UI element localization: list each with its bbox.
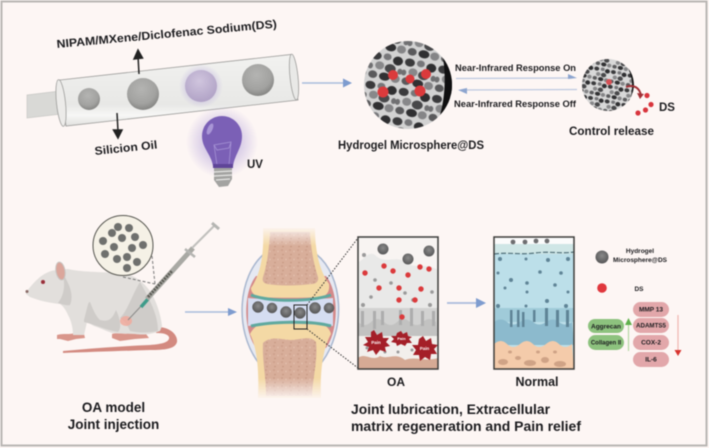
- released DS particles: [635, 93, 654, 116]
- droplet small: [78, 88, 100, 110]
- icon: UV bulb: [186, 106, 258, 187]
- pill: ADAMTS5: ADAMTS5: [636, 322, 667, 330]
- droplet cured: [242, 64, 274, 96]
- label: OA model / Joint injection: [68, 400, 159, 432]
- synovial lining: [246, 276, 336, 348]
- label: Joint lubrication heading: [351, 402, 582, 434]
- DS drug particles: [378, 69, 431, 98]
- label: Joint lubrication heading: Joint lubrication, Extracellular: [351, 402, 551, 417]
- legend: DS: DS: [634, 286, 644, 293]
- DS particles: [362, 263, 432, 320]
- pill: Aggrecan: Aggrecan: [591, 324, 621, 330]
- injection site: [120, 316, 132, 326]
- arrow: tube to microsphere: [302, 78, 352, 88]
- label: UV: UV: [247, 159, 263, 171]
- syringe: [128, 223, 219, 320]
- pill: MMP 13: MMP 13: [639, 306, 663, 314]
- capsule: [242, 254, 339, 362]
- upper bone: [251, 228, 329, 298]
- pain bursts: [363, 330, 438, 361]
- legend: hydrogel microsphere: Hydrogel: [626, 248, 654, 255]
- microspheres in joint: [252, 302, 334, 318]
- panel: Normal tissue: [494, 237, 574, 369]
- zoom dotted lines: [307, 238, 358, 368]
- rat body: [26, 269, 162, 335]
- rat with injection: [26, 216, 219, 353]
- legend: hydrogel microsphere: [596, 248, 668, 264]
- arrow: down to silicone oil: [114, 113, 122, 138]
- label: DS: DS: [659, 102, 675, 114]
- rat body shading: [58, 272, 158, 332]
- hydrogel microsphere with DS: [364, 41, 452, 129]
- label: OA model / Joint injection: OA model: [82, 400, 145, 415]
- surface microspheres: [511, 239, 549, 244]
- droplet under UV: [179, 64, 223, 108]
- rat eye: [41, 280, 45, 284]
- magnified microsphere circle: [93, 216, 153, 276]
- arrow: response off: [458, 88, 577, 94]
- arrow: release: [626, 86, 641, 96]
- label: OA: OA: [387, 375, 405, 389]
- label: Near-Infrared Response Off: Near-Infrared Response Off: [454, 99, 577, 110]
- joint anatomy: [242, 226, 358, 400]
- lower bone: [250, 324, 331, 398]
- legend: DS: [597, 283, 644, 293]
- pink downregulated markers: [633, 302, 669, 367]
- microfluidic tube: [27, 54, 300, 127]
- pill: Collagen II: Collagen II: [591, 340, 621, 346]
- arrow: up green: [625, 318, 632, 351]
- arrow: up to NIPAM label: [134, 50, 142, 74]
- pill: IL-6: IL-6: [645, 356, 657, 364]
- label: Control release: Control release: [569, 124, 654, 138]
- small microsphere releasing DS: [582, 59, 654, 116]
- microspheres: [378, 244, 434, 264]
- arrow: OA to normal: [447, 298, 486, 308]
- green upregulated markers: [588, 319, 624, 350]
- rat ear: [55, 261, 66, 281]
- dashed callout lines: [123, 256, 155, 284]
- cartilage: [251, 295, 331, 300]
- pill: COX-2: COX-2: [641, 340, 661, 346]
- arrow: down red: [674, 315, 682, 356]
- lower marrow: [263, 338, 316, 396]
- arrow: response on: [456, 74, 577, 79]
- synovial fluid: [248, 298, 333, 326]
- title: NIPAM/MXene/Diclofenac Sodium(DS): NIPAM/MXene/Diclofenac Sodium(DS): [56, 19, 278, 51]
- label: Normal: Normal: [515, 375, 559, 389]
- legend: hydrogel microsphere: Microsphere@DS: [613, 257, 668, 264]
- panel: OA tissue: [358, 237, 438, 369]
- label: Hydrogel Microsphere@DS: Hydrogel Microsphere@DS: [338, 138, 484, 152]
- rat tail: [63, 327, 177, 353]
- upper marrow: [263, 232, 318, 286]
- label: Near-Infrared Response On: Near-Infrared Response On: [455, 63, 576, 74]
- pain bursts: Pain: [397, 336, 406, 341]
- label: Joint lubrication heading: matrix regeneration and Pain relief: [351, 419, 582, 434]
- bone blobs: [498, 350, 566, 367]
- label: OA model / Joint injection: Joint injection: [68, 417, 159, 432]
- arrow: rat to joint: [185, 308, 237, 316]
- droplet medium: [127, 78, 159, 110]
- pain bursts: Pain: [420, 346, 429, 351]
- rat feet: [57, 333, 149, 341]
- pain bursts: Pain: [371, 340, 381, 345]
- label: Silicion Oil: Silicion Oil: [94, 139, 158, 158]
- zoom box: [294, 305, 307, 329]
